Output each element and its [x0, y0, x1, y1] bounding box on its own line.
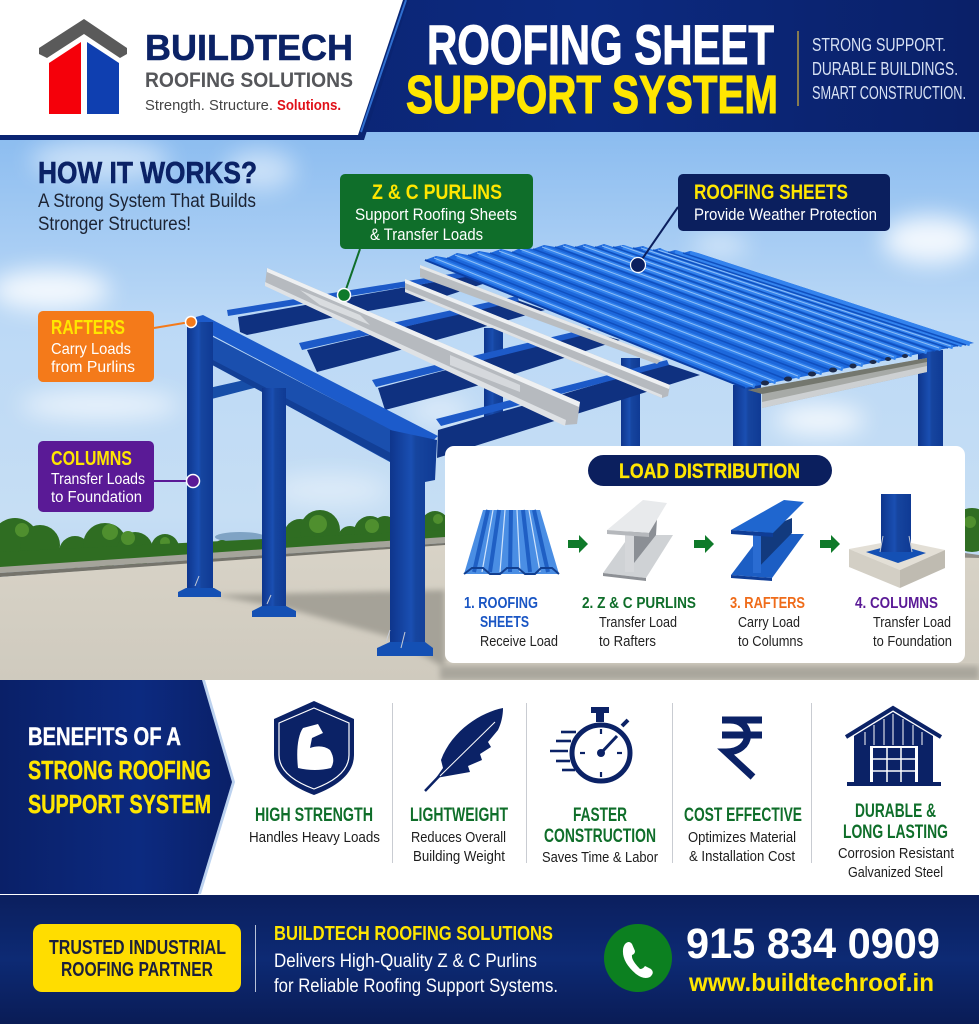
benefits heading block: STRONG ROOFING	[28, 755, 211, 785]
how it works heading	[38, 155, 257, 235]
step 1 label: SHEETS	[480, 614, 529, 631]
rear columns	[484, 328, 943, 448]
step 4 label: to Foundation	[873, 634, 952, 650]
corrugated roof sheet	[425, 244, 974, 388]
step 2 label: 2. Z & C PURLINS	[582, 595, 696, 612]
benefit: lightweight: Reduces Overall	[411, 829, 506, 846]
how it works heading: A Strong System That Builds	[38, 191, 256, 212]
callout: z and c purlins	[338, 174, 533, 302]
step 2 label: to Rafters	[599, 634, 656, 650]
panel: benefits	[0, 680, 979, 895]
company message: Delivers High-Quality Z & C Purlins	[274, 951, 537, 972]
callout: roofing sheets: ROOFING SHEETS	[694, 181, 848, 204]
benefit: lightweight: Building Weight	[413, 848, 506, 865]
leader line	[630, 207, 678, 272]
how it works heading: HOW IT WORKS?	[38, 155, 257, 190]
icon: rupee	[722, 720, 762, 777]
callout: rafters: RAFTERS	[51, 317, 125, 339]
logo wordmark	[145, 27, 353, 114]
leader line	[154, 474, 200, 488]
parapet	[0, 537, 979, 577]
leader line	[338, 249, 360, 302]
callout: rafters: Carry Loads	[51, 341, 131, 358]
benefits heading block: SUPPORT SYSTEM	[28, 789, 211, 819]
tagline: STRONG SUPPORT.	[812, 35, 946, 55]
icon: roofing sheet	[464, 510, 559, 574]
callout: z and c purlins: Z & C PURLINS	[372, 181, 502, 204]
arrow 3	[820, 535, 840, 553]
benefit: cost effective: COST EFFECTIVE	[684, 805, 802, 826]
callout: rafters	[38, 311, 196, 382]
panel: footer	[0, 895, 979, 1024]
step 3 label: Carry Load	[738, 615, 800, 631]
icon: phone	[604, 924, 672, 992]
column shadow	[213, 590, 445, 668]
step 3 label	[730, 595, 805, 650]
load distribution heading: LOAD DISTRIBUTION	[619, 460, 800, 483]
leader line	[154, 316, 196, 328]
callout: columns: COLUMNS	[51, 448, 132, 470]
rafter 3	[372, 328, 620, 410]
icon: column on footing	[849, 494, 945, 588]
silver purlin 2	[405, 279, 670, 398]
step 4 label: Transfer Load	[873, 615, 951, 631]
step 4 label: 4. COLUMNS	[855, 595, 938, 612]
benefit: faster construction: Saves Time & Labor	[542, 849, 658, 866]
distant hill and tree line	[0, 508, 979, 570]
eave purlin	[748, 358, 927, 408]
benefit: lightweight	[410, 708, 508, 865]
logo wordmark: Solutions.	[277, 97, 341, 114]
rafter 4	[436, 360, 700, 458]
benefit: lightweight: LIGHTWEIGHT	[410, 805, 508, 826]
silver purlin 1	[265, 268, 580, 426]
benefit: durable: Galvanized Steel	[848, 864, 943, 881]
benefit: faster construction	[542, 707, 658, 866]
logo wordmark: BUILDTECH	[145, 27, 353, 68]
arrow 1	[568, 535, 588, 553]
step 1 label: Receive Load	[480, 634, 558, 650]
step 1 label: 1. ROOFING	[464, 595, 538, 612]
company message	[274, 923, 558, 997]
logo wordmark: ROOFING SOLUTIONS	[145, 69, 353, 92]
callout: columns: Transfer Loads	[51, 471, 145, 488]
title: SUPPORT SYSTEM	[406, 65, 778, 125]
how it works heading: Stronger Structures!	[38, 214, 191, 235]
header: white logo panel	[0, 0, 409, 140]
callout: rafters: from Purlins	[51, 359, 135, 376]
company message: for Reliable Roofing Support Systems.	[274, 976, 558, 997]
benefit: cost effective: Optimizes Material	[688, 829, 796, 846]
callout: roofing sheets	[630, 174, 890, 272]
cross brace	[200, 377, 258, 402]
main rafter beam	[190, 315, 438, 472]
benefit: durable	[838, 708, 955, 881]
benefit: cost effective	[684, 720, 802, 865]
step 2 label: Transfer Load	[599, 615, 677, 631]
icon: silver purlin	[603, 500, 673, 581]
callout: roofing sheets: Provide Weather Protection	[694, 205, 877, 224]
trusted partner badge: TRUSTED INDUSTRIAL	[49, 937, 226, 959]
icon: stopwatch	[550, 707, 630, 781]
arrow 2	[694, 535, 714, 553]
benefit: high strength	[249, 701, 380, 846]
rafter 1	[227, 268, 495, 335]
benefit: durable: DURABLE &	[855, 801, 936, 822]
company message: BUILDTECH ROOFING SOLUTIONS	[274, 923, 553, 945]
step 2 label	[582, 595, 696, 650]
benefit: faster construction: FASTER	[573, 805, 627, 826]
step 3 label: 3. RAFTERS	[730, 595, 805, 612]
logo wordmark: Strength. Structure.	[145, 97, 273, 114]
benefit: high strength: Handles Heavy Loads	[249, 829, 380, 846]
benefit: high strength: HIGH STRENGTH	[255, 805, 373, 826]
header: navy title band	[0, 0, 979, 140]
benefit: faster construction: CONSTRUCTION	[544, 826, 656, 847]
website: www.buildtechroof.in	[688, 969, 934, 997]
load distribution heading	[588, 455, 832, 486]
logo mark	[39, 19, 127, 114]
icon: warehouse	[846, 708, 941, 786]
benefit: cost effective: & Installation Cost	[689, 848, 796, 865]
callout: z and c purlins: Support Roofing Sheets	[355, 205, 517, 224]
contact number: 915 834 0909	[686, 920, 940, 968]
callout: columns: to Foundation	[51, 489, 142, 506]
title	[406, 13, 778, 125]
callout: columns	[38, 441, 200, 512]
rafter 2	[299, 296, 545, 372]
trusted partner badge: ROOFING PARTNER	[61, 959, 213, 981]
benefits heading block	[0, 680, 235, 894]
tagline	[798, 31, 966, 106]
trusted partner badge	[33, 924, 241, 992]
title: ROOFING SHEET	[427, 13, 774, 76]
steel frame structure	[178, 244, 974, 656]
rear purlin	[420, 265, 663, 364]
benefits heading block: BENEFITS OF A	[28, 723, 181, 751]
benefit: durable: Corrosion Resistant	[838, 845, 955, 862]
icon: blue rafter	[731, 500, 804, 581]
icon: shield with arm	[274, 701, 354, 795]
callout: z and c purlins: & Transfer Loads	[370, 225, 483, 244]
icon: feather	[425, 708, 503, 791]
photo background: sky, clouds, trees and concrete roof	[0, 132, 979, 680]
step 4 label	[855, 595, 952, 650]
step 1 label	[464, 595, 558, 650]
panel: load distribution	[445, 446, 965, 663]
step 3 label: to Columns	[738, 634, 803, 650]
front columns and base plates	[178, 322, 437, 656]
